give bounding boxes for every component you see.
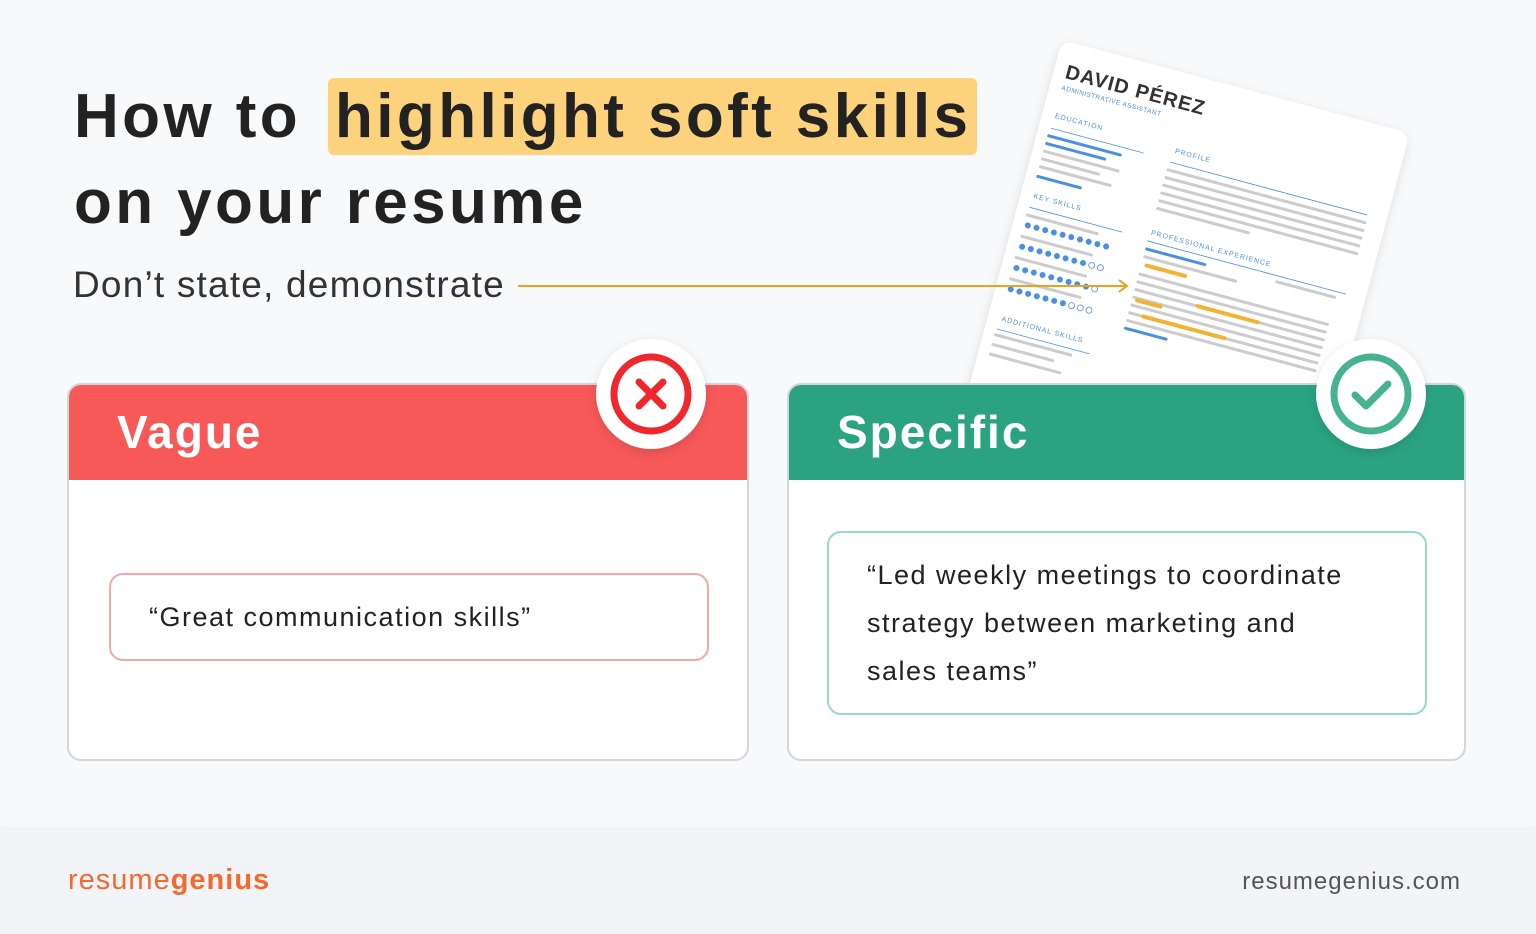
- title: How to highlight soft skills: [74, 82, 971, 151]
- footer: [0, 830, 1536, 934]
- heading: specific: Specific: [837, 406, 1029, 458]
- resume illustration: ADDITIONAL SKILLS: [1001, 316, 1084, 345]
- title: [74, 78, 977, 237]
- heading: vague: Vague: [117, 406, 263, 458]
- title: on your resume: [74, 168, 587, 237]
- quote: specific: [827, 531, 1427, 715]
- quote: vague: “Great communication skills”: [149, 602, 532, 632]
- arrow: subtitle to resume: [518, 279, 1128, 293]
- resume illustration: PROFESSIONAL EXPERIENCE: [1150, 230, 1272, 269]
- quote: vague: [109, 573, 709, 661]
- resume illustration: ADMINISTRATIVE ASSISTANT: [1061, 85, 1162, 118]
- heading: vague: [69, 385, 747, 480]
- panel: vague: [67, 383, 749, 761]
- resume illustration: DAVID PÉREZ: [1063, 60, 1208, 120]
- icon: red x: [593, 352, 709, 455]
- heading: specific: [789, 385, 1464, 480]
- icon: green check: [1315, 340, 1427, 452]
- subtitle: Don’t state, demonstrate: [73, 264, 505, 305]
- resume illustration: EDUCATION: [1054, 113, 1104, 133]
- quote: specific: “Led weekly meetings to coordinate strategy between marketing and sales teams”: [867, 560, 1343, 686]
- logo: resumegenius: [68, 864, 270, 896]
- panel: specific: [787, 383, 1466, 761]
- resume illustration: PROFILE: [1174, 148, 1212, 164]
- url: resumegenius.com: [1242, 868, 1461, 895]
- resume illustration: KEY SKILLS: [1033, 193, 1082, 213]
